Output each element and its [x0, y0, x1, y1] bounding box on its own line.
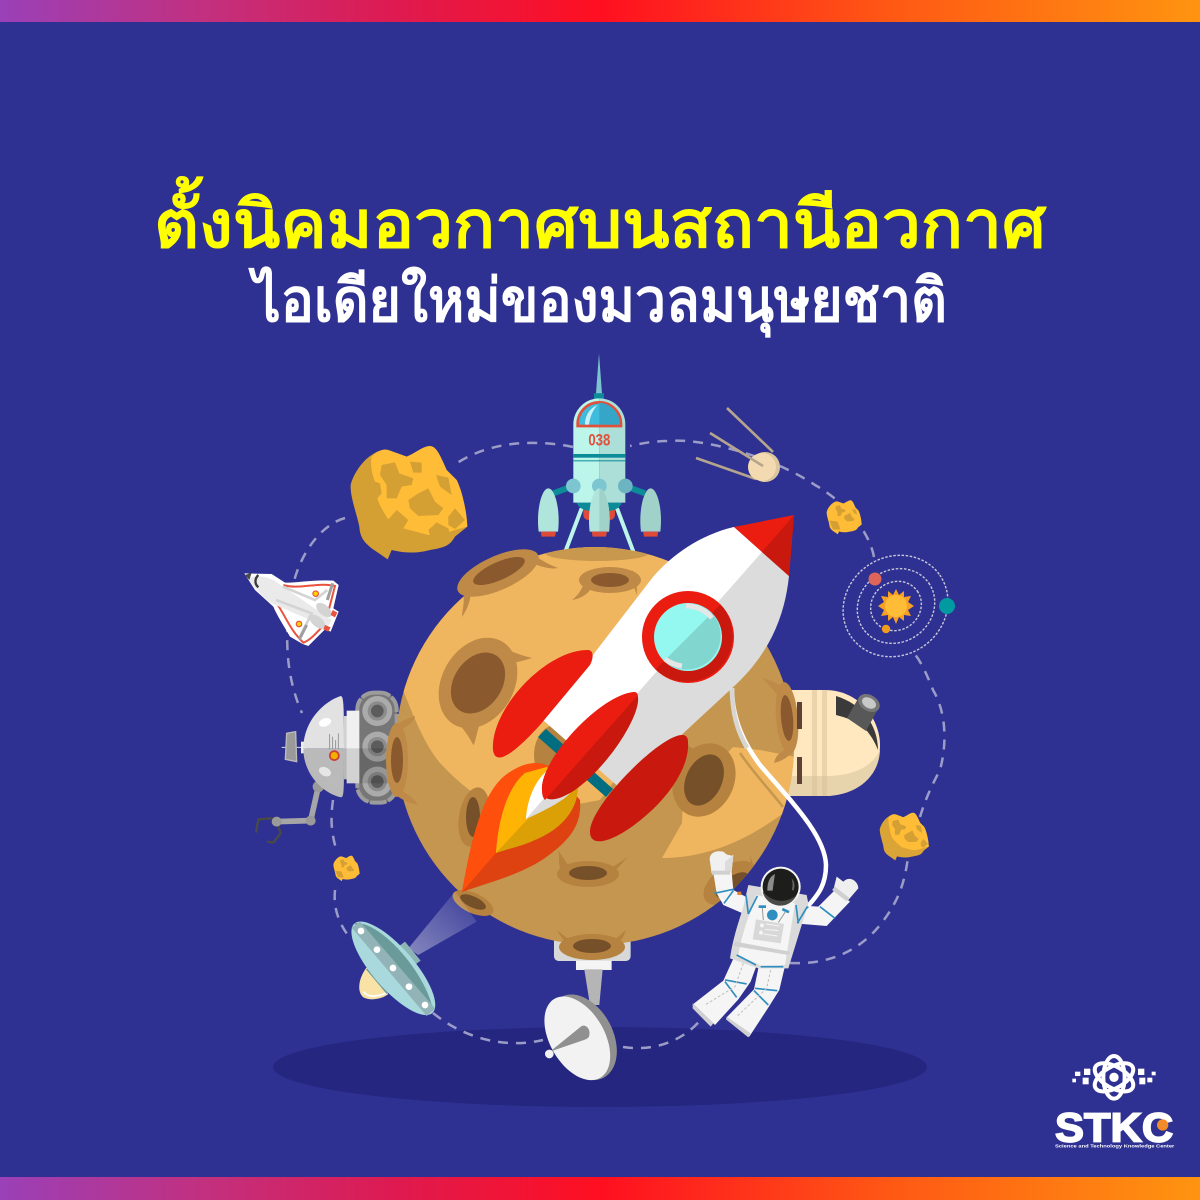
ufo	[339, 892, 477, 1027]
planet lit regions	[404, 547, 794, 905]
title: ตั้งนิคมอวกาศบนสถานีอวกาศ	[154, 175, 1047, 261]
helmet module slots	[797, 702, 802, 784]
logo nucleus and pixels	[1072, 1069, 1156, 1084]
rocket body	[543, 527, 789, 790]
rocket tail bar	[538, 729, 613, 797]
top gradient bar	[0, 0, 1200, 22]
satellite dish	[531, 983, 631, 1092]
asteroid right	[880, 813, 929, 860]
solar system	[823, 535, 968, 677]
rocket legs	[565, 508, 634, 553]
small asteroid top right	[827, 500, 862, 534]
ground shadow	[273, 1027, 927, 1107]
rocket number: 038	[588, 430, 610, 449]
bottom gradient bar	[0, 1177, 1200, 1200]
astronaut	[693, 851, 858, 1037]
logo wordmark: STKC	[1055, 1105, 1173, 1151]
flame	[462, 763, 580, 892]
tether	[732, 688, 826, 906]
planet	[386, 547, 798, 960]
tether shaded part	[732, 688, 747, 748]
dish mount	[554, 937, 631, 1005]
astronaut legs	[693, 955, 757, 1025]
craters	[386, 540, 801, 960]
title: ไอเดียใหม่ของมวลมนุษยชาติ	[247, 265, 947, 338]
helmet module	[785, 690, 883, 796]
logo atom	[1090, 1056, 1138, 1099]
rocket fins	[493, 650, 593, 758]
probe with arm	[256, 692, 397, 843]
dashed orbit	[287, 441, 944, 1048]
rocket window	[642, 591, 734, 683]
logo dot	[1157, 1119, 1168, 1131]
logo	[1055, 1056, 1175, 1151]
astronaut torso	[730, 885, 808, 968]
astronaut right arm	[795, 890, 850, 926]
big rocket	[493, 515, 794, 841]
logo caption: Science and Technology Knowledge Center	[1055, 1143, 1175, 1148]
satellite	[696, 408, 780, 482]
asteroid small left	[333, 856, 360, 881]
astronaut left arm	[711, 855, 752, 915]
shuttle	[244, 573, 339, 646]
asteroid: large	[351, 446, 467, 559]
astronaut helmet	[761, 867, 801, 907]
title	[154, 175, 1047, 338]
retro rocket	[538, 353, 661, 553]
